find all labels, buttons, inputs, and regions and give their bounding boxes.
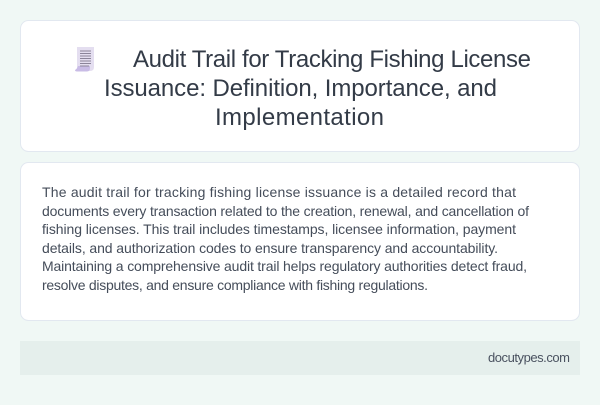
text block: description [42, 184, 529, 293]
text block: description: details, and authorization codes to ensure transparency and accountability. [42, 240, 498, 256]
text block: description: documents every transaction related to the creation, renewal, and cancellation of [42, 203, 529, 219]
footer bar [20, 341, 580, 375]
text block: description: The audit trail for tracking fishing license issuance is a detailed record that [42, 184, 516, 200]
footer text: docutypes.com [488, 350, 570, 365]
icon: audit document scroll [75, 47, 94, 72]
title: Implementation [215, 104, 384, 131]
panel: description card [20, 162, 580, 320]
title [104, 46, 531, 131]
title: Audit Trail for Tracking Fishing License [133, 46, 531, 73]
title: Issuance: Definition, Importance, and [104, 75, 497, 102]
text block: description: fishing licenses. This trail includes timestamps, licensee information, payment [42, 221, 516, 237]
text block: description: Maintaining a comprehensive audit trail helps regulatory authorities detect fraud, [42, 258, 527, 274]
panel: title card [20, 20, 580, 152]
text block: description: resolve disputes, and ensure compliance with fishing regulations. [42, 277, 428, 293]
